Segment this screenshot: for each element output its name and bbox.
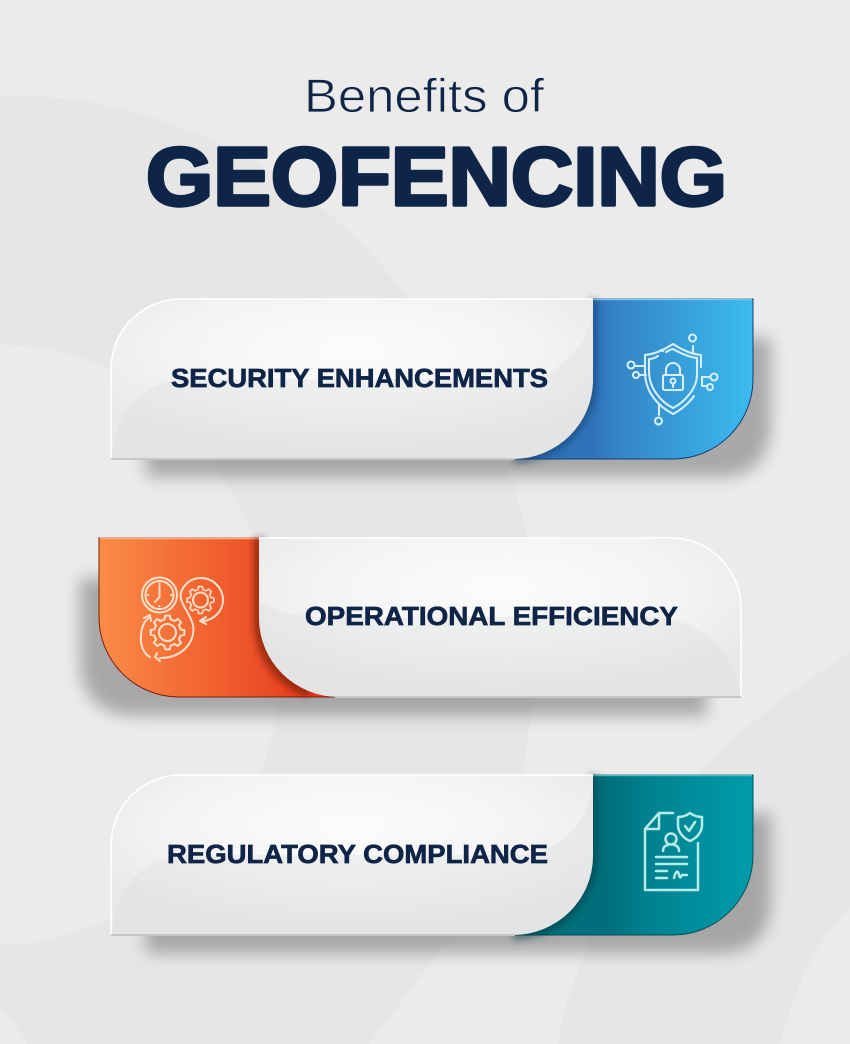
tab inner shadow [513,299,593,459]
card shadow [80,578,707,716]
icon: shield with lock and circuit nodes [628,334,718,424]
heading: Benefits of: Benefits of [304,69,545,122]
heading: GEOFENCING: GEOFENCING [146,130,727,223]
label: SECURITY ENHANCEMENTS [171,363,548,393]
tab inner shadow [259,538,310,692]
orange tab [99,538,340,697]
label: OPERATIONAL EFFICIENCY [305,601,678,631]
icon: clock and gears with arrows [141,578,223,661]
tab inner shadow [513,775,593,935]
panel: regulatory compliance [111,775,771,953]
blue tab [510,299,753,459]
icon: document with shield [645,813,702,890]
teal tab [510,775,753,935]
label: REGULATORY COMPLIANCE [167,839,548,869]
card shadow [146,814,771,953]
title [146,69,727,223]
panel: security enhancements [111,299,771,477]
card lower shade [259,600,741,697]
panel: operational efficiency [80,538,741,716]
card shadow [146,338,771,477]
card lower shade [112,310,593,459]
card lower shade [112,786,593,935]
white label card [259,538,741,697]
white label card [111,775,593,935]
white label card [111,299,593,459]
